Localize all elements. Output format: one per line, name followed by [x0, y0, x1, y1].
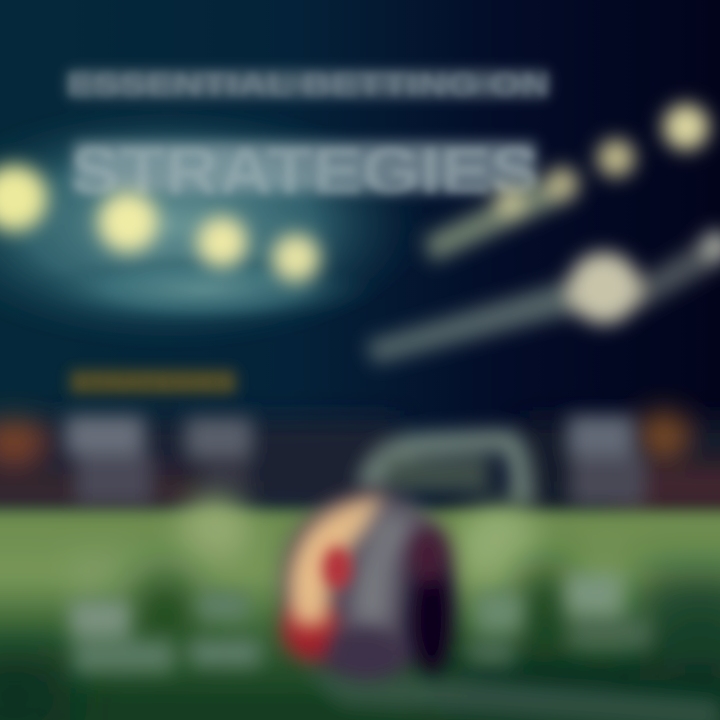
diagonal light streak, upper right: [424, 104, 709, 262]
pitch dark patches: [0, 560, 720, 720]
goal frame: [368, 440, 522, 542]
title line 2: STRATEGIES: [70, 133, 540, 209]
yellow subtitle bar: STRATEGIES: [72, 370, 234, 395]
ball lower red edge: [282, 600, 342, 660]
grass pitch: [0, 510, 720, 720]
soccer ball: [282, 493, 454, 677]
upper text blocks in stands: [66, 416, 646, 507]
crowd band: [0, 410, 720, 515]
row of stadium lights, left: [0, 165, 320, 282]
lower text blocks on pitch: [70, 574, 650, 672]
ball grey centre: [348, 500, 430, 640]
ball dark shadow side: [410, 564, 454, 676]
title line 1: ESSENTIAL BETTING ON: [66, 66, 550, 104]
stadium light haze: [0, 100, 430, 350]
diagonal light streak with large lamp, right: [366, 230, 720, 364]
pitch light patches: [70, 496, 540, 589]
ball lower purple panel: [329, 626, 401, 674]
bottom pitch streak: [300, 665, 720, 720]
ball lit cream edge: [288, 496, 385, 625]
haze band under lights: [30, 254, 380, 326]
ball red patch: [322, 546, 352, 590]
ball maroon upper patch: [408, 527, 448, 583]
ball base: [282, 493, 454, 677]
